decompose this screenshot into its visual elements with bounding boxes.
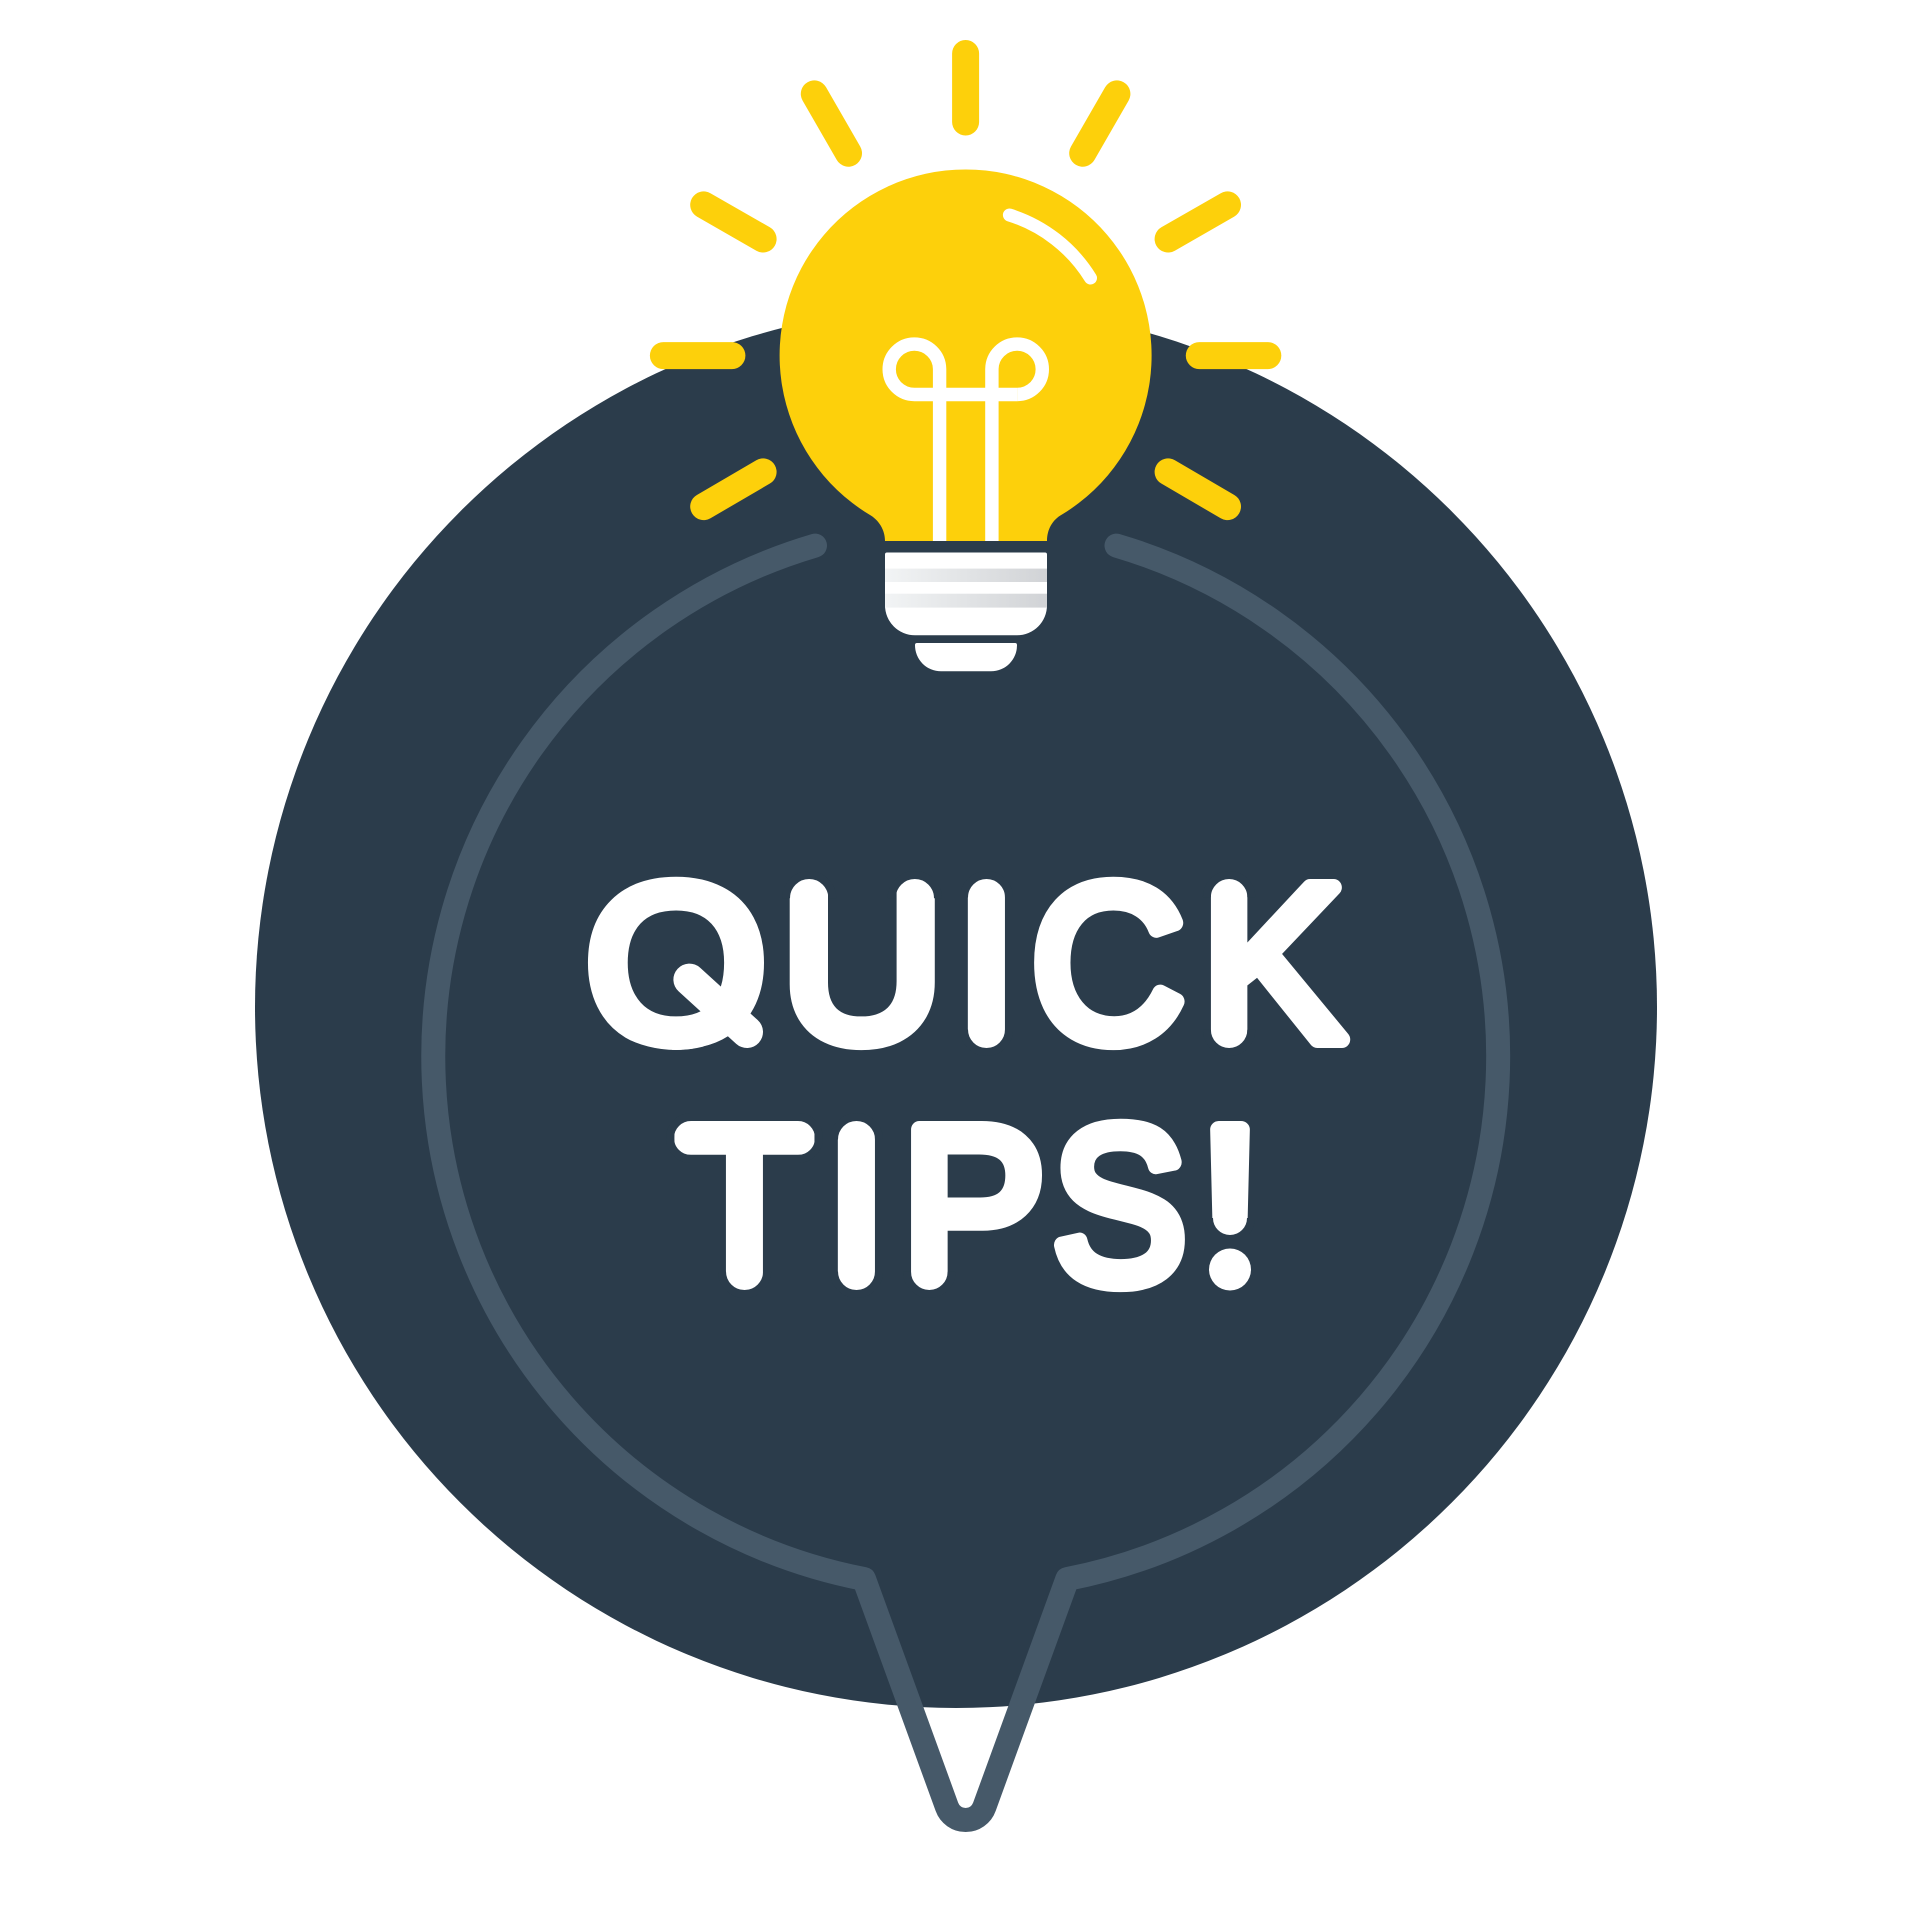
title line: QUICK: C — [1032, 840, 1184, 1086]
title line: TIPS!: T — [678, 1082, 811, 1328]
title — [588, 876, 1350, 1292]
title line: TIPS!: ! — [1198, 1082, 1262, 1328]
filament — [889, 344, 1042, 541]
glass highlight — [1009, 215, 1090, 278]
title line: TIPS!: I — [826, 1082, 887, 1328]
base cap — [915, 643, 1017, 671]
screw base — [885, 552, 1047, 635]
title line: QUICK: U — [781, 840, 944, 1086]
title line: QUICK: Q — [586, 840, 766, 1086]
speech bubble outline — [433, 546, 1498, 1820]
title line: TIPS! — [670, 1082, 1262, 1328]
title line: QUICK: K — [1202, 840, 1344, 1086]
title line: QUICK: I — [956, 840, 1017, 1086]
background circle — [255, 306, 1657, 1708]
light bulb — [780, 169, 1152, 671]
title line: TIPS!: P — [902, 1082, 1045, 1328]
title line: TIPS!: S — [1053, 1082, 1186, 1328]
title line: QUICK — [588, 876, 1350, 1050]
bulb glass — [780, 169, 1152, 541]
light rays — [663, 54, 1268, 507]
